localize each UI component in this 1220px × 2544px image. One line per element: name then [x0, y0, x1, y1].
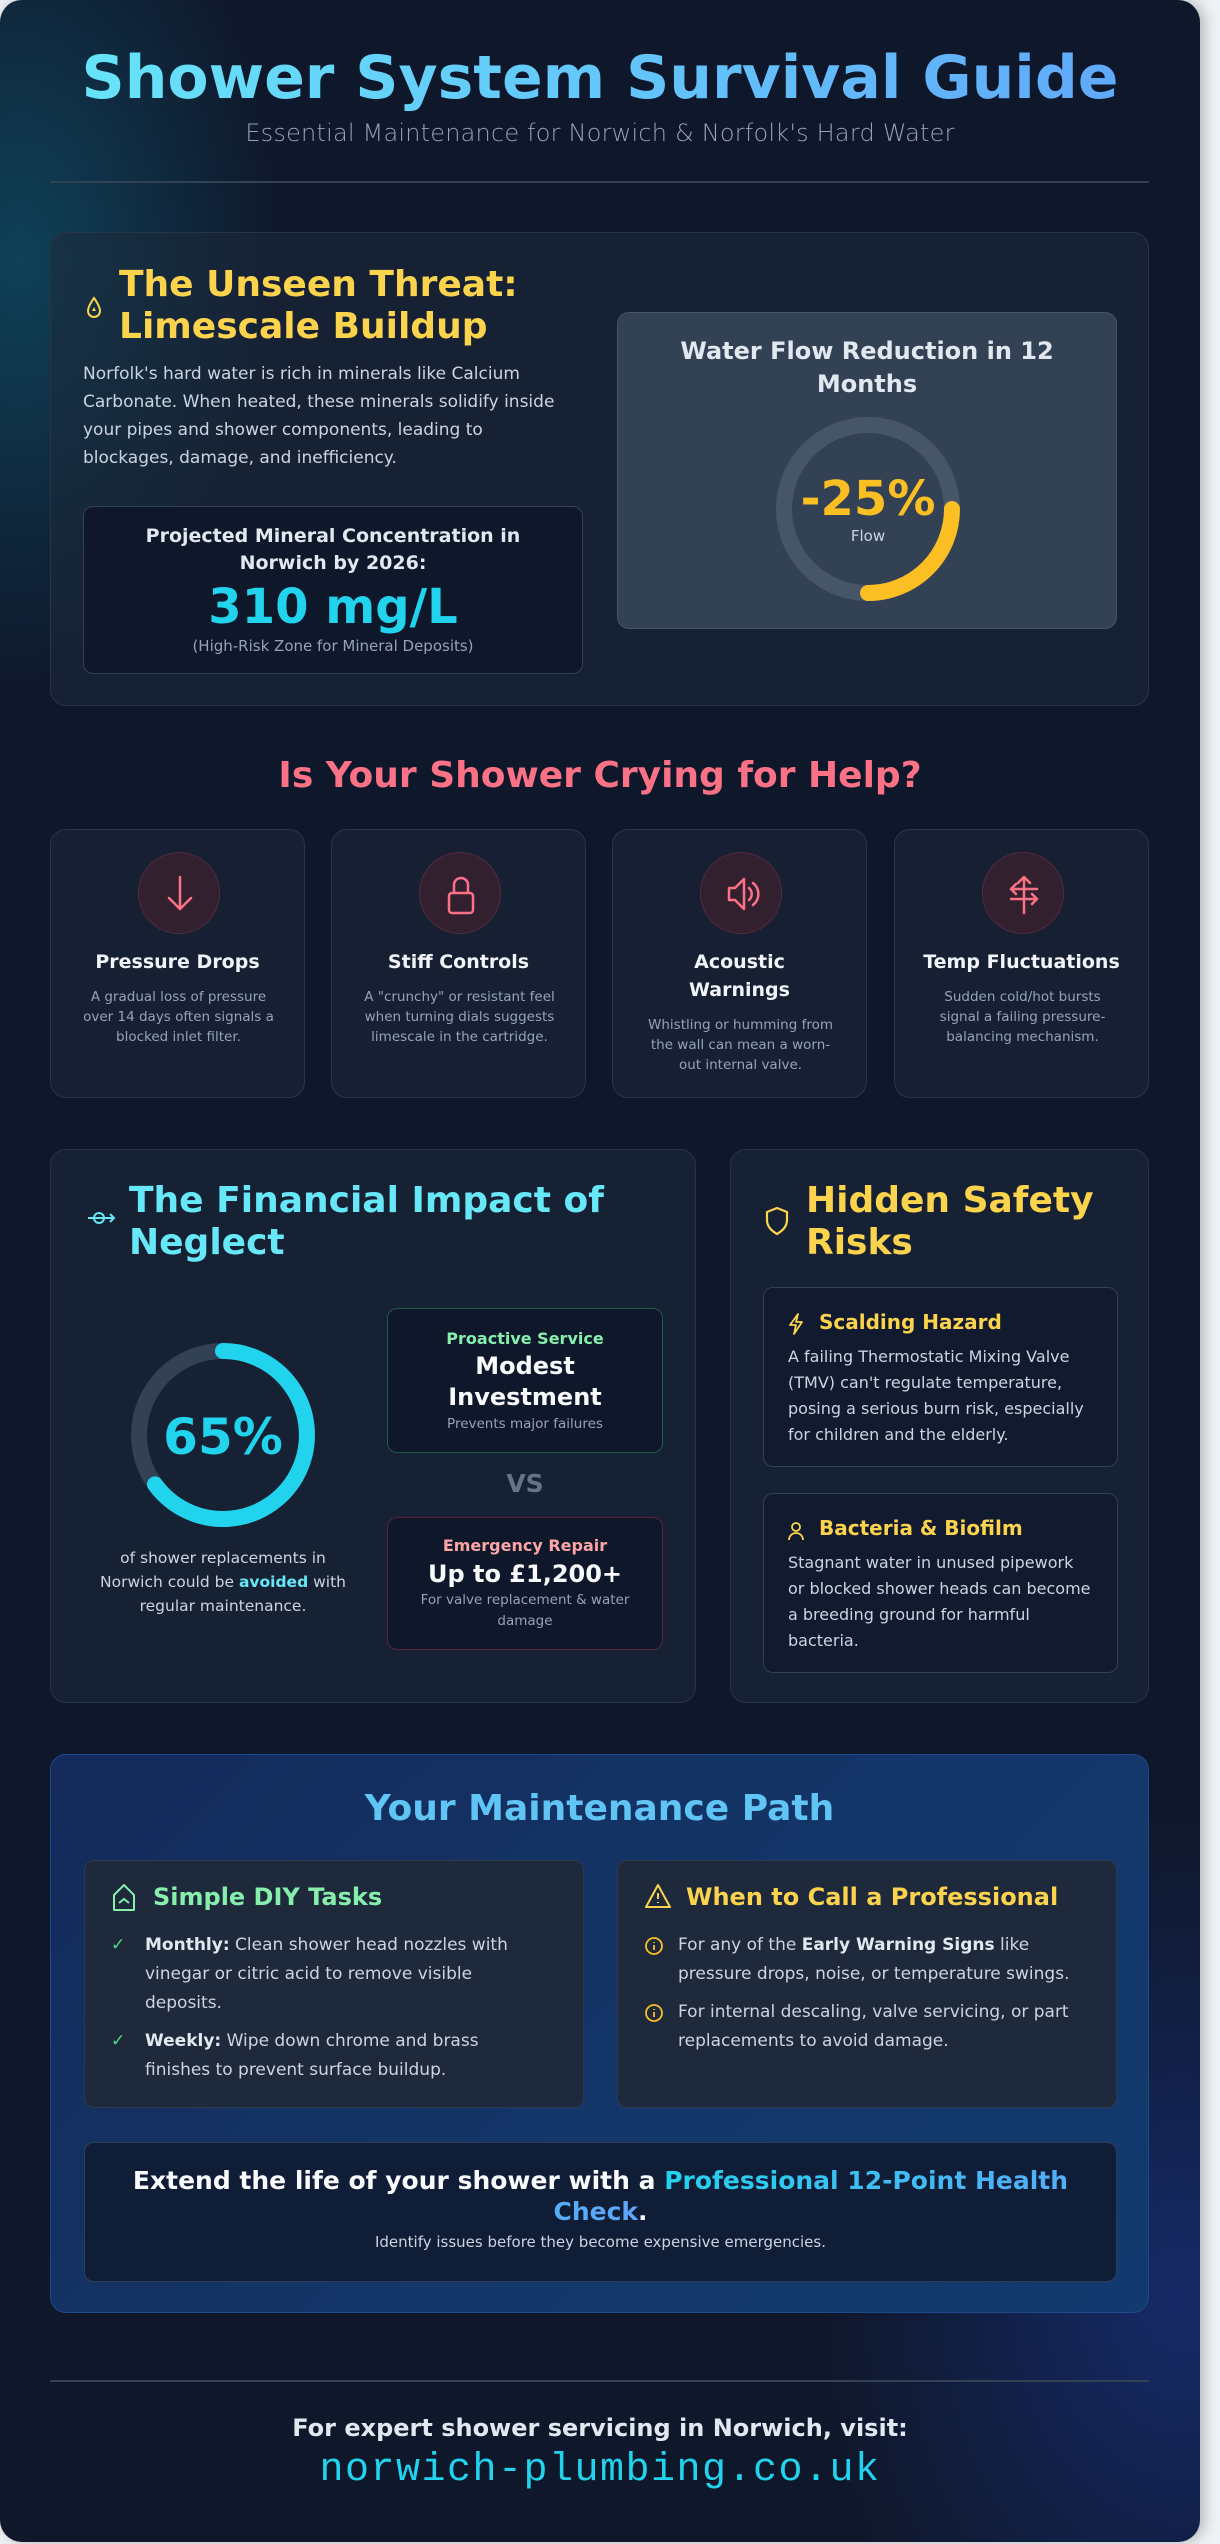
heading: Limescale Buildup [119, 306, 487, 347]
callout: scalding: A failing Thermostatic Mixing Valve (TMV) can't regulate temperature, posing a serious burn risk, especially for children and the elderly. [788, 1347, 1084, 1444]
panel: financial impact [50, 1149, 696, 1703]
icon: shield [766, 1206, 788, 1236]
chart: 65% donut: 65% [163, 1408, 283, 1466]
chart: 65% donut [131, 1343, 315, 1527]
icon: speaker [700, 852, 782, 934]
chart: water flow gauge: Flow [851, 527, 885, 545]
callout: health check CTA: Extend the life of your shower with a Professional 12-Point Health Check. [133, 2166, 1068, 2226]
panel: temp fluctuations: Sudden cold/hot bursts signal a failing pressure-balancing mechanism. [940, 989, 1105, 1045]
text block: Norfolk's hard water is rich in minerals like Calcium Carbonate. When heated, these minerals solidify inside your pipes and shower components, leading to blockages, damage, and inefficiency. [83, 364, 554, 468]
panel: professional: When to Call a Professional [686, 1883, 1058, 1911]
heading [119, 264, 518, 347]
panel: professional: For any of the Early Warning Signs like pressure drops, noise, or temperature swings. [678, 1935, 1069, 1984]
panel: professional: For internal descaling, valve servicing, or part replacements to avoid damage. [678, 2002, 1069, 2051]
callout: bacteria: Stagnant water in unused pipework or blocked shower heads can become a breeding ground for harmful bacteria. [788, 1553, 1090, 1650]
icon: arrows [982, 852, 1064, 934]
callout: proactive: Modest [475, 1352, 575, 1380]
heading: Your Maintenance Path [365, 1788, 834, 1829]
panel: acoustic warnings: Acoustic [694, 951, 785, 973]
panel: limescale [50, 232, 1149, 706]
callout: 310 mg/L: Projected Mineral Concentration in [146, 525, 520, 547]
panel: maintenance path [50, 1754, 1149, 2313]
panel: acoustic warnings: Whistling or humming from the wall can mean a worn-out internal valve. [648, 1017, 833, 1073]
icon: arrow down [138, 852, 220, 934]
panel: pressure drops [50, 829, 305, 1098]
panel: DIY: Simple DIY Tasks [153, 1883, 382, 1911]
heading [129, 1180, 604, 1263]
heading [806, 1180, 1094, 1263]
heading: The Financial Impact of [129, 1180, 604, 1221]
chart: water flow gauge [617, 312, 1117, 629]
title: Shower System Survival Guide [82, 43, 1118, 113]
panel: DIY: ✓ [111, 1935, 125, 1955]
callout: emergency: For valve replacement & water damage [421, 1592, 629, 1629]
icon: droplet [87, 296, 101, 318]
callout: 310 mg/L [83, 506, 583, 674]
label: vs: VS [506, 1469, 544, 1498]
callout: health check CTA: Identify issues before they become expensive emergencies. [375, 2233, 826, 2251]
subtitle: Essential Maintenance for Norwich & Norfolk's Hard Water [245, 119, 955, 147]
panel: DIY: ✓ [111, 2031, 125, 2051]
chart: water flow gauge: Months [817, 370, 917, 398]
callout: scalding [763, 1287, 1118, 1467]
heading: Neglect [129, 1222, 285, 1263]
icon: pound [88, 1212, 116, 1224]
text: 65% caption: of shower replacements in Norwich could be avoided with regular maintenance. [100, 1549, 346, 1615]
callout: proactive: Prevents major failures [447, 1416, 603, 1432]
callout: emergency: Emergency Repair [443, 1536, 607, 1555]
panel: pressure drops: A gradual loss of pressure over 14 days often signals a blocked inlet filter. [83, 989, 274, 1045]
panel: temp fluctuations [894, 829, 1149, 1098]
panel: DIY: Weekly: Wipe down chrome and brass finishes to prevent surface buildup. [145, 2031, 479, 2080]
chart: water flow gauge: -25% [801, 471, 935, 527]
callout: emergency: Up to £1,200+ [428, 1560, 622, 1588]
panel: stiff controls [331, 829, 586, 1098]
panel: acoustic warnings: Warnings [689, 979, 790, 1001]
panel: stiff controls: Stiff Controls [388, 951, 529, 973]
callout: emergency [387, 1517, 663, 1650]
panel: acoustic warnings [612, 829, 867, 1098]
callout: bacteria [763, 1493, 1118, 1673]
callout: proactive [387, 1308, 663, 1453]
panel: temp fluctuations: Temp Fluctuations [923, 951, 1120, 973]
heading: Risks [806, 1222, 913, 1263]
footer text: For expert shower servicing in Norwich, visit: [292, 2414, 908, 2442]
callout: bacteria: Bacteria & Biofilm [819, 1516, 1023, 1540]
callout: 310 mg/L: (High-Risk Zone for Mineral Deposits) [192, 637, 474, 655]
panel: safety risks [730, 1149, 1149, 1703]
footer url: norwich-plumbing.co.uk [319, 2448, 881, 2493]
chart: water flow gauge: Water Flow Reduction in 12 [680, 337, 1054, 365]
icon: lock [419, 852, 501, 934]
callout: 310 mg/L: 310 mg/L [208, 579, 458, 635]
callout: 310 mg/L: Norwich by 2026: [240, 552, 426, 574]
panel: professional [617, 1860, 1117, 2108]
callout: health check CTA [84, 2142, 1117, 2282]
heading: The Unseen Threat: [119, 264, 518, 305]
callout: proactive: Investment [448, 1383, 602, 1411]
callout: scalding: Scalding Hazard [819, 1310, 1002, 1334]
panel: stiff controls: A "crunchy" or resistant feel when turning dials suggests limescale in the cartridge. [364, 989, 555, 1045]
heading: Hidden Safety [806, 1180, 1094, 1221]
callout: proactive: Proactive Service [446, 1329, 604, 1348]
heading: crying for help: Is Your Shower Crying for Help? [278, 755, 922, 796]
panel: pressure drops: Pressure Drops [95, 951, 260, 973]
panel: DIY: Monthly: Clean shower head nozzles with vinegar or citric acid to remove visible deposits. [145, 1935, 508, 2013]
panel: DIY [84, 1860, 584, 2108]
